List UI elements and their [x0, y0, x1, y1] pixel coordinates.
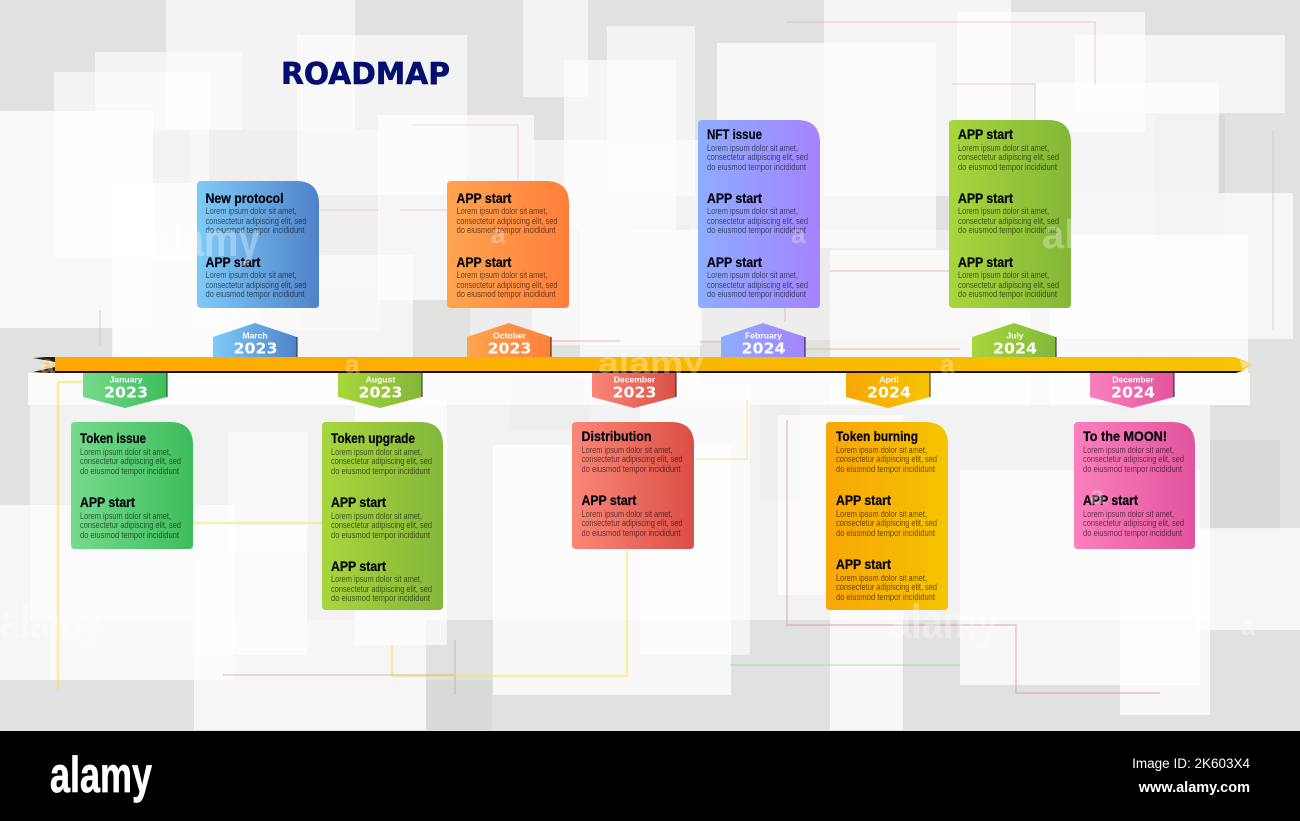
text: description: Lorem ipsum dolor sit amet, — [582, 445, 672, 455]
heading: Token burning: Token burning — [836, 429, 918, 444]
date badge: March 2023: 2023 — [234, 340, 278, 358]
date badge: January 2023: 2023 — [104, 384, 148, 402]
text: description: do eiusmod tempor incididunt — [80, 530, 179, 540]
date badge: February 2024: February — [745, 330, 782, 340]
website: www.alamy.com — [1138, 780, 1250, 796]
text: description — [1083, 509, 1184, 538]
heading: APP start: APP start — [456, 191, 512, 206]
text: description: do eiusmod tempor incididunt — [836, 592, 935, 602]
text: description: consectetur adipiscing elit, sed — [707, 280, 808, 290]
text: description — [707, 206, 808, 235]
date badge: August 2023 — [338, 372, 422, 408]
text: description: consectetur adipiscing elit, sed — [958, 280, 1059, 290]
text: description: consectetur adipiscing elit, sed — [331, 520, 432, 530]
text: description — [958, 270, 1059, 299]
date badge: December 2024: December — [1112, 374, 1154, 384]
text: description: do eiusmod tempor incididunt — [707, 162, 806, 172]
text: description: consectetur adipiscing elit, sed — [80, 456, 181, 466]
text: description — [582, 445, 683, 474]
heading: APP start: APP start — [958, 191, 1013, 206]
text: description — [836, 445, 937, 474]
text: description: consectetur adipiscing elit, sed — [836, 582, 937, 592]
text: description: do eiusmod tempor incididunt — [1083, 528, 1182, 538]
date badge: October 2023 — [467, 323, 551, 358]
watermarks: a — [40, 349, 55, 379]
watermarks: a — [1090, 480, 1105, 510]
text: description: consectetur adipiscing elit, sed — [707, 152, 808, 162]
text: description: do eiusmod tempor incididunt — [331, 466, 430, 476]
text: description: Lorem ipsum dolor sit amet, — [707, 206, 798, 216]
text: description: consectetur adipiscing elit, sed — [836, 454, 937, 464]
date badge: March 2023: March — [242, 330, 268, 340]
text: description: Lorem ipsum dolor sit amet, — [707, 270, 798, 280]
text: description: consectetur adipiscing elit, sed — [1083, 518, 1184, 528]
date badge: December 2023 — [592, 372, 676, 408]
text: description: consectetur adipiscing elit, sed — [836, 518, 937, 528]
footer bar — [0, 731, 1300, 821]
title: ROADMAP — [281, 57, 450, 92]
text: description: consectetur adipiscing elit, sed — [582, 454, 683, 464]
text: description: consectetur adipiscing elit, sed — [80, 520, 181, 530]
text: description: do eiusmod tempor incididunt — [707, 289, 806, 299]
footer logo: alamy — [50, 747, 152, 803]
heading: NFT issue: NFT issue — [707, 127, 762, 142]
text: description: consectetur adipiscing elit, sed — [707, 216, 808, 226]
text: description — [1083, 445, 1184, 474]
heading: APP start: APP start — [582, 493, 637, 508]
date badge: March 2023 — [213, 323, 297, 358]
panel: Token issue card — [71, 422, 193, 549]
text: description: Lorem ipsum dolor sit amet, — [80, 447, 171, 457]
text: description: do eiusmod tempor incididunt — [80, 466, 179, 476]
heading: APP start: APP start — [958, 255, 1013, 270]
text: description: consectetur adipiscing elit, sed — [456, 280, 558, 290]
text: description — [707, 270, 808, 299]
text: description: Lorem ipsum dolor sit amet, — [331, 447, 422, 457]
heading: APP start: APP start — [958, 127, 1013, 142]
heading: APP start: APP start — [206, 255, 261, 270]
text: description: consectetur adipiscing elit, sed — [456, 216, 558, 226]
text: description: Lorem ipsum dolor sit amet, — [958, 143, 1049, 153]
heading: APP start: APP start — [331, 559, 386, 574]
text: description — [958, 143, 1059, 172]
text: description: Lorem ipsum dolor sit amet, — [707, 143, 798, 153]
text: description: consectetur adipiscing elit, sed — [331, 456, 432, 466]
text: description — [206, 270, 307, 299]
text: description: Lorem ipsum dolor sit amet, — [836, 509, 927, 519]
text: description: Lorem ipsum dolor sit amet, — [836, 445, 927, 455]
text: description: Lorem ipsum dolor sit amet, — [456, 270, 548, 280]
date badge: April 2024: April — [879, 374, 899, 384]
text: description: do eiusmod tempor incididunt — [456, 225, 556, 235]
date badge: October 2023: October — [493, 330, 527, 340]
date badge: February 2024: 2024 — [742, 340, 786, 358]
text: description: consectetur adipiscing elit, sed — [1083, 454, 1184, 464]
watermarks: a — [1241, 611, 1256, 641]
panel: Token burning card — [826, 422, 948, 610]
text: description — [206, 206, 307, 235]
date badge: April 2024: 2024 — [867, 384, 911, 402]
text: description: Lorem ipsum dolor sit amet, — [582, 509, 672, 519]
text: description: do eiusmod tempor incididunt — [331, 593, 430, 603]
text: description: consectetur adipiscing elit, sed — [958, 216, 1059, 226]
date badge: February 2024 — [721, 323, 805, 358]
panel: To the MOON card — [1074, 422, 1195, 549]
heading: Distribution: Distribution — [582, 429, 652, 444]
text: description: Lorem ipsum dolor sit amet, — [958, 270, 1049, 280]
heading: APP start: APP start — [331, 495, 386, 510]
watermarks: al — [1042, 213, 1075, 257]
text: description — [80, 511, 181, 540]
panel: October card — [447, 181, 569, 308]
heading: APP start: APP start — [836, 557, 891, 572]
text: description: Lorem ipsum dolor sit amet, — [1083, 445, 1174, 455]
watermarks: alamy — [598, 347, 704, 380]
date badge: August 2023: 2023 — [358, 384, 402, 402]
text: description — [958, 206, 1059, 235]
text: description: do eiusmod tempor incididunt — [1083, 464, 1182, 474]
text: description: do eiusmod tempor incididunt — [958, 162, 1057, 172]
date badge: April 2024 — [846, 372, 930, 408]
text: description: do eiusmod tempor incididunt — [707, 225, 806, 235]
date badge: July 2024: July — [1006, 330, 1024, 340]
text: description — [707, 143, 808, 172]
date badge: January 2023 — [83, 372, 167, 408]
text: description: consectetur adipiscing elit, sed — [958, 152, 1059, 162]
text: description — [456, 270, 558, 299]
heading: APP start: APP start — [707, 191, 762, 206]
text: description: consectetur adipiscing elit, sed — [206, 216, 307, 226]
text: description: do eiusmod tempor incididunt — [331, 530, 430, 540]
watermarks: a — [491, 219, 506, 249]
heading: APP start: APP start — [456, 255, 512, 270]
text: description: do eiusmod tempor incididunt — [958, 225, 1057, 235]
text: description: Lorem ipsum dolor sit amet, — [836, 573, 927, 583]
watermarks — [0, 213, 1256, 649]
text: description — [80, 447, 181, 476]
heading: To the MOON!: To the MOON! — [1083, 429, 1167, 444]
panel: Distribution card — [572, 422, 694, 549]
heading: APP start: APP start — [1083, 493, 1138, 508]
text: description — [836, 573, 937, 602]
text: description — [582, 509, 683, 538]
text: description: Lorem ipsum dolor sit amet, — [1083, 509, 1174, 519]
timeline arrow bar — [33, 357, 1252, 373]
watermarks: a — [940, 349, 955, 379]
text: description: consectetur adipiscing elit, sed — [582, 518, 683, 528]
text: description: do eiusmod tempor incididunt — [958, 289, 1057, 299]
text: description: Lorem ipsum dolor sit amet, — [206, 270, 296, 280]
date badge: December 2024 — [1090, 372, 1174, 408]
date badge: July 2024: 2024 — [993, 340, 1037, 358]
text: description: Lorem ipsum dolor sit amet, — [206, 206, 296, 216]
text: description — [836, 509, 937, 538]
text: description — [331, 574, 432, 603]
watermarks: a — [791, 219, 806, 249]
text: description: do eiusmod tempor incididunt — [456, 289, 556, 299]
heading: APP start: APP start — [80, 495, 135, 510]
text: description: consectetur adipiscing elit, sed — [206, 280, 307, 290]
text: description — [456, 206, 558, 235]
watermarks: a — [345, 349, 360, 379]
text: description: do eiusmod tempor incididunt — [582, 464, 681, 474]
panel: NFT issue card — [698, 120, 820, 308]
heading: Token upgrade: Token upgrade — [331, 431, 415, 446]
text: description — [331, 511, 432, 540]
date badge: August 2023: August — [366, 374, 395, 384]
date badge: January 2023: January — [110, 374, 143, 384]
text: description: Lorem ipsum dolor sit amet, — [456, 206, 548, 216]
text: description: Lorem ipsum dolor sit amet, — [331, 574, 422, 584]
text: description: consectetur adipiscing elit, sed — [331, 584, 432, 594]
panel: Token upgrade card — [322, 422, 443, 610]
heading: APP start: APP start — [707, 255, 762, 270]
date badge: July 2024 — [972, 323, 1056, 358]
text: description: Lorem ipsum dolor sit amet, — [958, 206, 1049, 216]
watermarks: alamy — [150, 214, 260, 267]
text: description: Lorem ipsum dolor sit amet, — [80, 511, 171, 521]
heading: Token issue: Token issue — [80, 431, 146, 446]
panel: July card — [949, 120, 1071, 308]
image id: Image ID: 2K603X4 — [1132, 756, 1250, 771]
text: description: do eiusmod tempor incididunt — [836, 464, 935, 474]
text: description: Lorem ipsum dolor sit amet, — [331, 511, 422, 521]
text: description: do eiusmod tempor incididunt — [206, 225, 305, 235]
text: description: do eiusmod tempor incididunt — [582, 528, 681, 538]
date badge: December 2023: December — [614, 374, 656, 384]
date badge: October 2023: 2023 — [488, 340, 532, 358]
text: description: do eiusmod tempor incididunt — [206, 289, 305, 299]
watermarks: alamy — [890, 596, 998, 649]
panel: New protocol card — [197, 181, 319, 308]
text: description: do eiusmod tempor incididunt — [836, 528, 935, 538]
watermarks: alamy — [0, 596, 102, 649]
text: description — [331, 447, 432, 476]
date badge: December 2024: 2024 — [1111, 384, 1155, 402]
heading: New protocol: New protocol — [206, 191, 284, 206]
date badge: December 2023: 2023 — [612, 384, 656, 402]
heading: APP start: APP start — [836, 493, 891, 508]
